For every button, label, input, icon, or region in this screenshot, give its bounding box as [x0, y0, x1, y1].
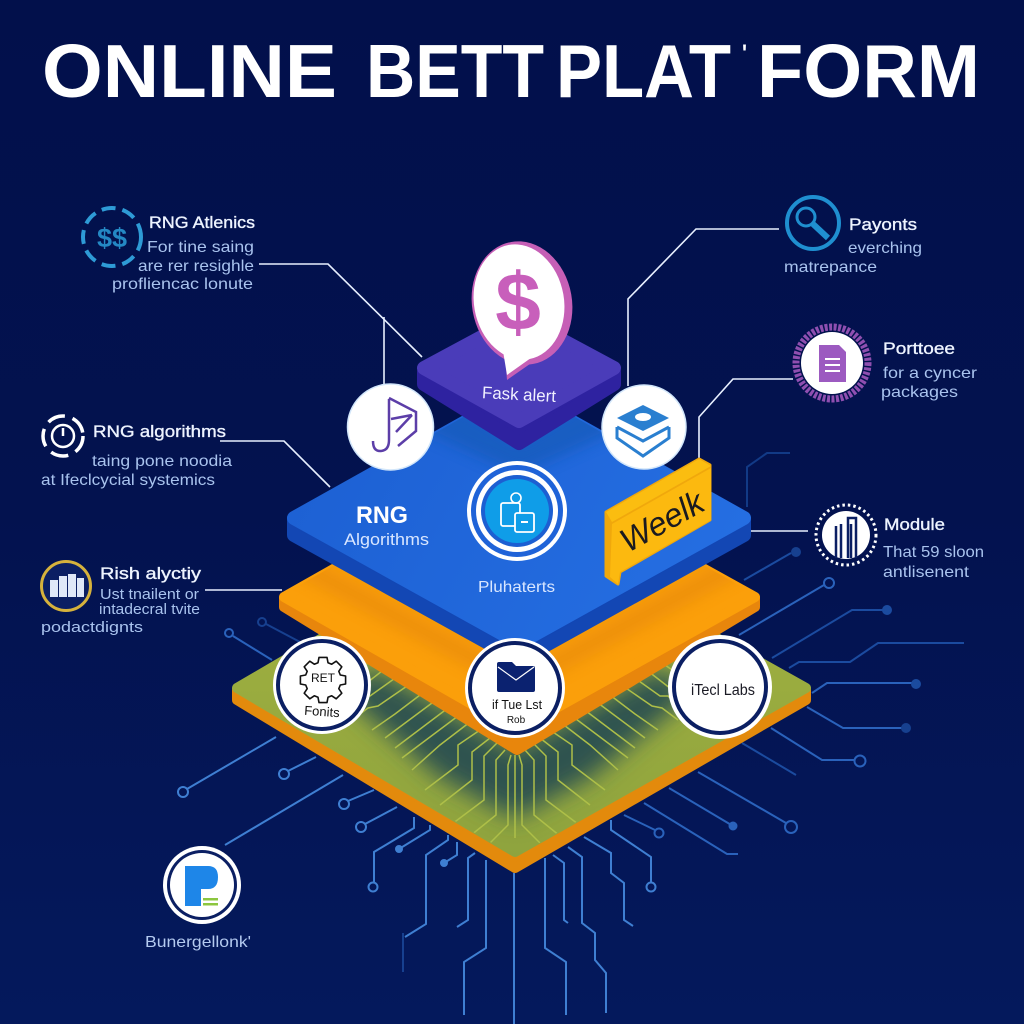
layer: purple [424, 317, 614, 443]
badge: folder If Tue Lst: Rob [507, 715, 526, 726]
description: That 59 sloon [883, 544, 984, 561]
purple surface [424, 317, 614, 421]
callout sign: Weelk: Weelk [613, 482, 711, 559]
description: Ust tnailent or [100, 586, 199, 603]
purple side [424, 372, 614, 443]
connector lines [205, 229, 808, 590]
description [112, 239, 254, 293]
label: Pluhaterts: Pluhaterts [478, 579, 555, 596]
layer: blue [287, 416, 751, 652]
description [881, 365, 978, 401]
orange surface [284, 465, 755, 730]
description: profliencac lonute [112, 276, 253, 293]
description [784, 240, 922, 276]
badge: folder If Tue Lst [465, 638, 565, 738]
board copper traces [362, 663, 678, 843]
badge: gear RET Fonits: Fonits [304, 703, 341, 720]
icon: document ring [796, 327, 868, 399]
description: podactdignts [41, 619, 143, 636]
description [41, 586, 200, 636]
badge: gear RET Fonits: RET [311, 671, 336, 685]
left circuit traces [178, 618, 397, 845]
title: ' [742, 40, 747, 67]
badge: iTecl Labs: iTecl Labs [691, 682, 755, 699]
icon: dollar speech bubble: $ [495, 257, 541, 348]
description: packages [881, 384, 958, 401]
description: everching [848, 240, 922, 257]
callout sign: Weelk [606, 459, 711, 584]
orange side [284, 598, 755, 750]
board dark core [340, 668, 695, 818]
description: are rer resighle [138, 258, 254, 275]
caption: Bunergellonk' [145, 934, 251, 951]
heading: RNG Atlenics [149, 213, 255, 232]
badge: iTecl Labs [668, 635, 772, 739]
description [41, 453, 232, 489]
layer: orange [279, 564, 760, 755]
description: antlisenent [883, 564, 970, 581]
description: For tine saing [147, 239, 254, 256]
heading: Rish alyctiy [100, 564, 202, 583]
callout: RNG algorithms [41, 416, 232, 489]
badge: gear RET Fonits [273, 636, 371, 734]
bottom circuit traces [368, 817, 656, 1024]
icon: dollar speech bubble [462, 233, 582, 380]
callout: RNG Allenics [83, 208, 255, 293]
circuit traces [178, 453, 964, 1024]
blue side [294, 519, 744, 660]
title: ONLINE [42, 29, 337, 113]
label: RNG Algorithms: RNG [356, 502, 408, 529]
title: FORM [757, 29, 980, 113]
description [883, 544, 984, 581]
icon: P logo [163, 846, 241, 924]
title [42, 29, 980, 113]
callout: Payonts [784, 197, 922, 276]
board surface [237, 525, 806, 852]
layer: circuit board [232, 634, 811, 873]
callout: Rish alyctiy [41, 562, 202, 636]
blue surface [294, 392, 744, 643]
heading: RNG algorithms [93, 422, 226, 441]
description: taing pone noodia [92, 453, 232, 470]
badge: folder If Tue Lst: if Tue Lst [492, 697, 542, 712]
description: at Ifeclcycial systemics [41, 472, 215, 489]
icon: gold ring building [42, 562, 90, 610]
title: BETT [366, 29, 544, 113]
title: PLAT [556, 29, 731, 113]
label: RNG Algorithms: Algorithms [344, 530, 429, 549]
logo badge: Bunergellonk [145, 846, 251, 951]
label: RNG Algorithms [344, 502, 429, 549]
heading: Module [884, 515, 945, 534]
icon: magnifier ring [787, 197, 839, 249]
label: Fask alert: Fask alert [482, 383, 557, 406]
icon: music note circle [348, 384, 434, 470]
description: for a cyncer [883, 365, 978, 382]
description: matrepance [784, 259, 877, 276]
callout: Porttoee [796, 327, 978, 401]
heading: Payonts [849, 215, 917, 234]
board side [237, 690, 806, 868]
icon: central lock circle [467, 461, 567, 561]
right circuit traces [624, 453, 964, 854]
icon: dashed dollar ring [83, 208, 141, 266]
callout: Module [816, 505, 984, 581]
icon: towers ring [816, 505, 876, 565]
icon: dashed dollar ring: $$ [97, 223, 127, 253]
icon: stacked layers circle [602, 385, 686, 469]
heading: Porttoee [883, 339, 955, 358]
description: intadecral tvite [99, 601, 200, 618]
icon: power cycle [43, 416, 83, 456]
